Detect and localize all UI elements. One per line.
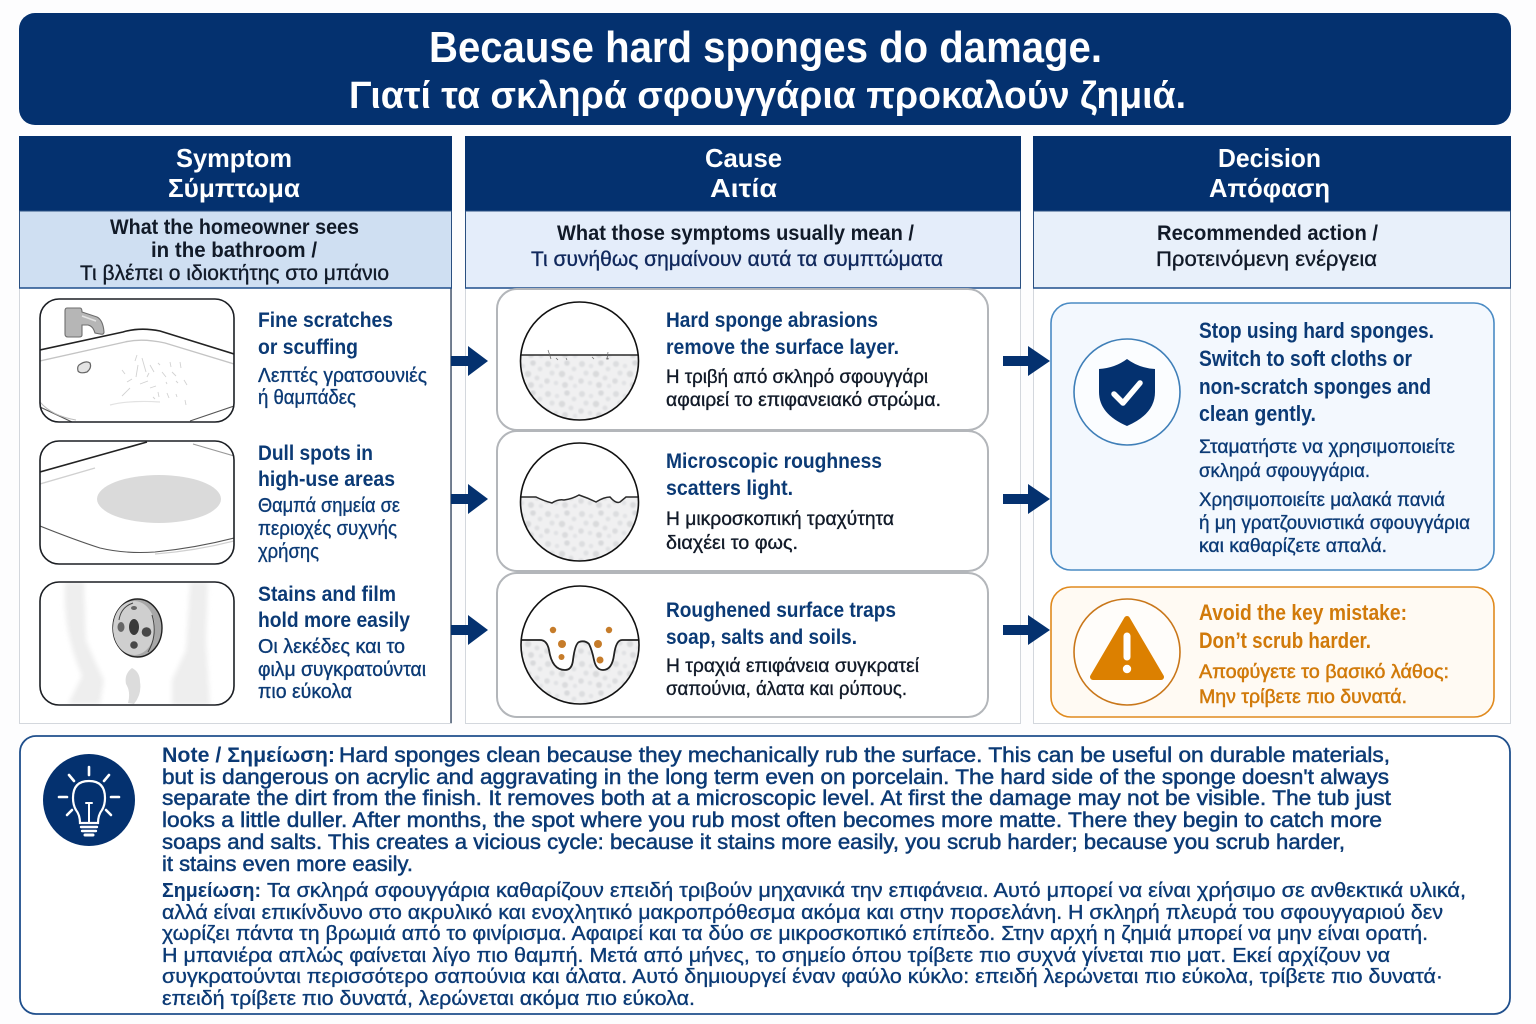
text: roughness: scatters light.: [666, 477, 793, 500]
title banner: [19, 13, 1511, 125]
text: recommendation: ή μη γρατζουνιστικά σφουγγάρια: [1199, 513, 1470, 534]
arrow: cause 2 to decision: [1003, 484, 1050, 514]
note text: Greek: Τα σκληρά σφουγγάρια καθαρίζουν επειδή τριβούν μηχανικά την επιφάνεια. Αυτό μπορεί να είναι χρήσιμο σε ανθεκτικά υλικά,: [267, 879, 1466, 902]
cause column header: Αιτία: [710, 173, 777, 203]
decision column subheading: Recommended action /: [1157, 222, 1378, 245]
note text: English: Hard sponges clean because they mechanically rub the surface. This can be useful on durable materials,: [339, 744, 1390, 767]
text: warning: [1199, 600, 1449, 708]
symptom column header: Σύμπτωμα: [168, 173, 300, 203]
note text: Greek: αλλά είναι επικίνδυνο στο ακρυλικό και ενοχλητικό μακροπρόθεσμα ακόμα και στην πορσελάνη. Η σκληρή πλευρά του σφουγγαριού δεν: [162, 901, 1443, 924]
arrow: symptom 1 to cause 1: [451, 346, 488, 376]
decision column header: Decision: [1218, 143, 1321, 173]
text: warning: Αποφύγετε το βασικό λάθος:: [1199, 662, 1449, 683]
text: warning: Avoid the key mistake:: [1199, 600, 1407, 625]
text: warning: Don’t scrub harder.: [1199, 628, 1371, 653]
cause column subheading: Τι συνήθως σημαίνουν αυτά τα συμπτώματα: [531, 248, 943, 271]
text: roughness: διαχέει το φως.: [666, 533, 798, 554]
note text: English: [162, 744, 1391, 876]
note text: Greek: συγκρατούνται περισσότερο σαπούνια και άλατα. Αυτό δημιουργεί έναν φαύλο κύκλο: επειδή λερώνεται πιο εύκολα, τρίβετε πιο δυνατά·: [162, 965, 1443, 988]
text: fine scratches: Λεπτές γρατσουνιές: [258, 365, 427, 387]
panel: symptom column: [19, 136, 452, 724]
text: stains and film: πιο εύκολα: [258, 681, 352, 703]
diagram: pitted surface with trapped soils: [520, 586, 640, 706]
text: stains and film: hold more easily: [258, 609, 410, 632]
text: roughened: σαπούνια, άλατα και ρύπους.: [666, 679, 907, 700]
illustration: stained drain: [40, 582, 234, 705]
text: recommendation: Χρησιμοποιείτε μαλακά πανιά: [1199, 490, 1445, 511]
text: abrasions: αφαιρεί το επιφανειακό στρώμα.: [666, 390, 941, 411]
symptom column header: Symptom: [176, 143, 292, 173]
text: roughened: Η τραχιά επιφάνεια συγκρατεί: [666, 656, 920, 677]
text: fine scratches: [258, 309, 427, 409]
card: roughened surface: [497, 573, 988, 717]
arrow: symptom 2 to cause 2: [451, 484, 488, 514]
symptom column subheading: [19, 211, 452, 288]
text: stains and film: φιλμ συγκρατούνται: [258, 659, 426, 681]
text: roughness: Η μικροσκοπική τραχύτητα: [666, 509, 894, 530]
text: recommendation: Σταματήστε να χρησιμοποιείτε: [1199, 437, 1456, 458]
card: recommended action: [1051, 303, 1494, 570]
text: roughened: soap, salts and soils.: [666, 626, 857, 649]
note text: Greek: [162, 879, 1466, 1010]
note text: English: soaps and salts. This creates a vicious cycle: because it stains more easily, you scrub harder; because you scrub harder,: [162, 831, 1345, 854]
text: recommendation: και καθαρίζετε απαλά.: [1199, 536, 1387, 557]
icon: warning triangle: [1074, 599, 1180, 705]
decision column header: Απόφαση: [1209, 173, 1330, 203]
text: recommendation: Switch to soft cloths or: [1199, 346, 1412, 371]
panel: decision column: [1033, 136, 1511, 724]
text: abrasions: remove the surface layer.: [666, 336, 899, 359]
cause column header: Cause: [705, 143, 782, 173]
arrow: cause 3 to decision: [1003, 615, 1050, 645]
arrow: cause 1 to decision: [1003, 346, 1050, 376]
card: key mistake warning: [1051, 587, 1494, 717]
panel: note: [20, 736, 1510, 1014]
note text: Greek: Η μπανιέρα απλώς φαίνεται λίγο πιο θαμπή. Μετά από μήνες, το σημείο όπου τρίβετε πιο συχνά γίνεται πιο ματ. Εκεί αρχίζουν να: [162, 944, 1390, 967]
text: dull spots: high-use areas: [258, 468, 395, 491]
text: abrasions: [666, 309, 941, 411]
cause column header: [465, 136, 1021, 211]
card: hard sponge abrasions: [497, 289, 988, 430]
illustration: dull spot: [40, 441, 234, 564]
text: dull spots: περιοχές συχνής: [258, 518, 397, 540]
text: stains and film: [258, 583, 426, 703]
diagram: rough surface: [520, 443, 640, 562]
text: roughened: Roughened surface traps: [666, 599, 896, 622]
symptom column subheading: in the bathroom /: [151, 239, 317, 262]
title: English: Because hard sponges do damage.: [429, 23, 1102, 72]
card: microscopic roughness: [497, 431, 988, 571]
decision column subheading: [1033, 211, 1511, 288]
note text: English: Note / Σημείωση:: [162, 744, 335, 767]
text: dull spots: χρήσης: [258, 541, 319, 563]
note text: English: it stains even more easily.: [162, 853, 413, 876]
note text: Greek: Σημείωση:: [162, 879, 261, 902]
decision column header: [1033, 136, 1511, 211]
note text: English: but is dangerous on acrylic and aggravating in the long term even on porcelain. The hard side of the sponge doesn't always: [162, 766, 1389, 789]
text: stains and film: Stains and film: [258, 583, 396, 606]
title: Greek: Γιατί τα σκληρά σφουγγάρια προκαλούν ζημιά.: [349, 75, 1186, 117]
text: recommendation: clean gently.: [1199, 401, 1316, 426]
text: roughness: [666, 450, 894, 554]
text: dull spots: Dull spots in: [258, 442, 373, 465]
text: recommendation: σκληρά σφουγγάρια.: [1199, 461, 1370, 482]
note text: English: separate the dirt from the finish. It removes both at a microscopic level. At first the damage may not be visible. The tub just: [162, 787, 1391, 810]
arrow: symptom 3 to cause 3: [451, 615, 488, 645]
text: roughness: Microscopic roughness: [666, 450, 882, 473]
text: roughened: [666, 599, 920, 700]
text: fine scratches: Fine scratches: [258, 309, 393, 332]
text: dull spots: [258, 442, 400, 563]
text: fine scratches: ή θαμπάδες: [258, 387, 356, 409]
symptom column subheading: Τι βλέπει ο ιδιοκτήτης στο μπάνιο: [80, 262, 389, 285]
diagram: abraded surface: [520, 302, 640, 421]
text: warning: Μην τρίβετε πιο δυνατά.: [1199, 687, 1407, 708]
text: abrasions: Hard sponge abrasions: [666, 309, 878, 332]
panel: cause column: [465, 136, 1021, 724]
icon: light bulb: [43, 754, 135, 846]
cause column subheading: What those symptoms usually mean /: [557, 222, 914, 245]
note text: English: looks a little duller. After months, the spot where you rub most often becomes more matte. There they begin to catch more: [162, 809, 1382, 832]
decision column subheading: Προτεινόμενη ενέργεια: [1156, 248, 1377, 271]
symptom column header: [19, 136, 452, 211]
text: recommendation: [1199, 318, 1470, 557]
text: recommendation: Stop using hard sponges.: [1199, 318, 1434, 343]
illustration: scratched tub: [40, 299, 234, 422]
symptom column subheading: What the homeowner sees: [110, 216, 359, 239]
text: dull spots: Θαμπά σημεία σε: [258, 495, 400, 517]
icon: shield with check: [1074, 339, 1180, 445]
note text: Greek: χωρίζει πάντα τη βρωμιά από το φινίρισμα. Αφαιρεί και τα δύο σε μικροσκοπικό επίπεδο. Στην αρχή η ζημιά μπορεί να μην είναι ορατή.: [162, 922, 1428, 945]
text: fine scratches: or scuffing: [258, 336, 358, 359]
text: recommendation: non-scratch sponges and: [1199, 374, 1431, 399]
text: abrasions: Η τριβή από σκληρό σφουγγάρι: [666, 367, 928, 388]
text: stains and film: Οι λεκέδες και το: [258, 636, 405, 658]
note text: Greek: επειδή τρίβετε πιο δυνατά, λερώνεται ακόμα πιο εύκολα.: [162, 987, 695, 1010]
cause column subheading: [465, 211, 1021, 288]
